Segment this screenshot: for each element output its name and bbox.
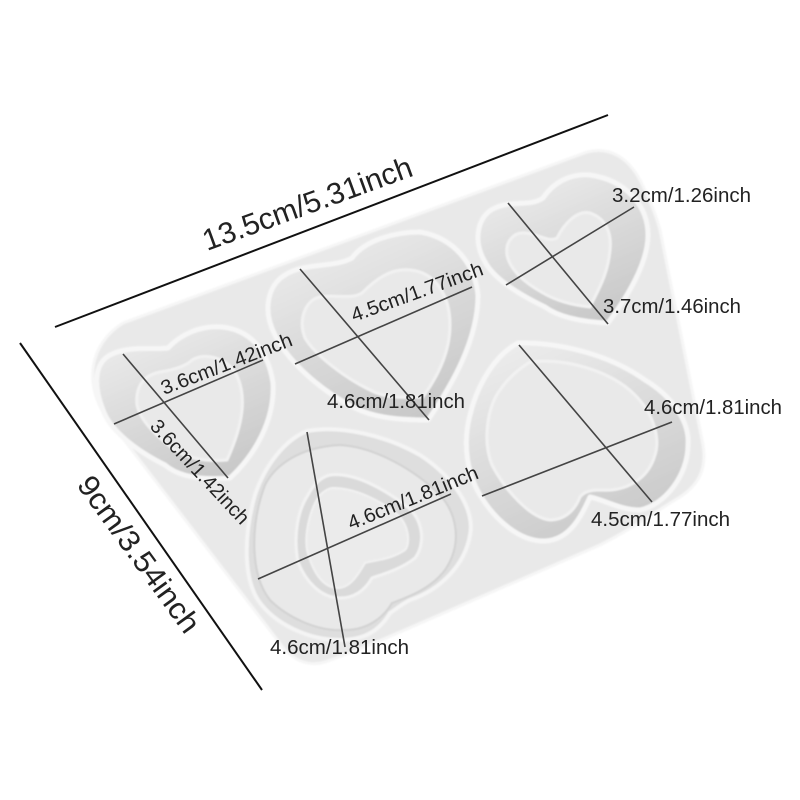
left heart dimensions: 3.6cm/1.42inch bbox=[145, 415, 254, 529]
bottom heart dimensions: 4.6cm/1.81inch bbox=[345, 462, 482, 535]
top middle heart dimensions: 4.6cm/1.81inch bbox=[327, 391, 465, 413]
tray body bbox=[93, 150, 704, 664]
overall width dimension bbox=[55, 115, 608, 327]
overall width dimension: 13.5cm/5.31inch bbox=[198, 151, 417, 258]
overall height dimension bbox=[20, 343, 262, 690]
mold cavity: left heart bbox=[97, 327, 273, 479]
bottom heart dimensions: 4.6cm/1.81inch bbox=[270, 637, 409, 659]
bottom heart dimensions bbox=[258, 432, 482, 659]
overall height dimension: 9cm/3.54inch bbox=[70, 470, 206, 640]
mold cavity: top right heart bbox=[478, 175, 648, 323]
mold cavity: top middle heart bbox=[268, 232, 478, 420]
lower right heart dimensions: 4.5cm/1.77inch bbox=[591, 509, 730, 531]
top right heart dimensions: 3.7cm/1.46inch bbox=[603, 296, 741, 318]
top middle heart dimensions bbox=[295, 258, 486, 420]
mold cavity: bottom nested heart bbox=[247, 429, 471, 640]
silicone mold tray bbox=[93, 150, 704, 664]
left heart dimensions bbox=[114, 329, 296, 529]
lower right heart dimensions bbox=[482, 345, 782, 531]
left heart dimensions: 3.6cm/1.42inch bbox=[158, 329, 296, 400]
mold cavity: lower right heart bbox=[466, 343, 688, 541]
top right heart dimensions bbox=[506, 185, 751, 324]
top middle heart dimensions: 4.5cm/1.77inch bbox=[348, 258, 486, 327]
lower right heart dimensions: 4.6cm/1.81inch bbox=[644, 397, 782, 419]
top right heart dimensions: 3.2cm/1.26inch bbox=[612, 185, 751, 207]
